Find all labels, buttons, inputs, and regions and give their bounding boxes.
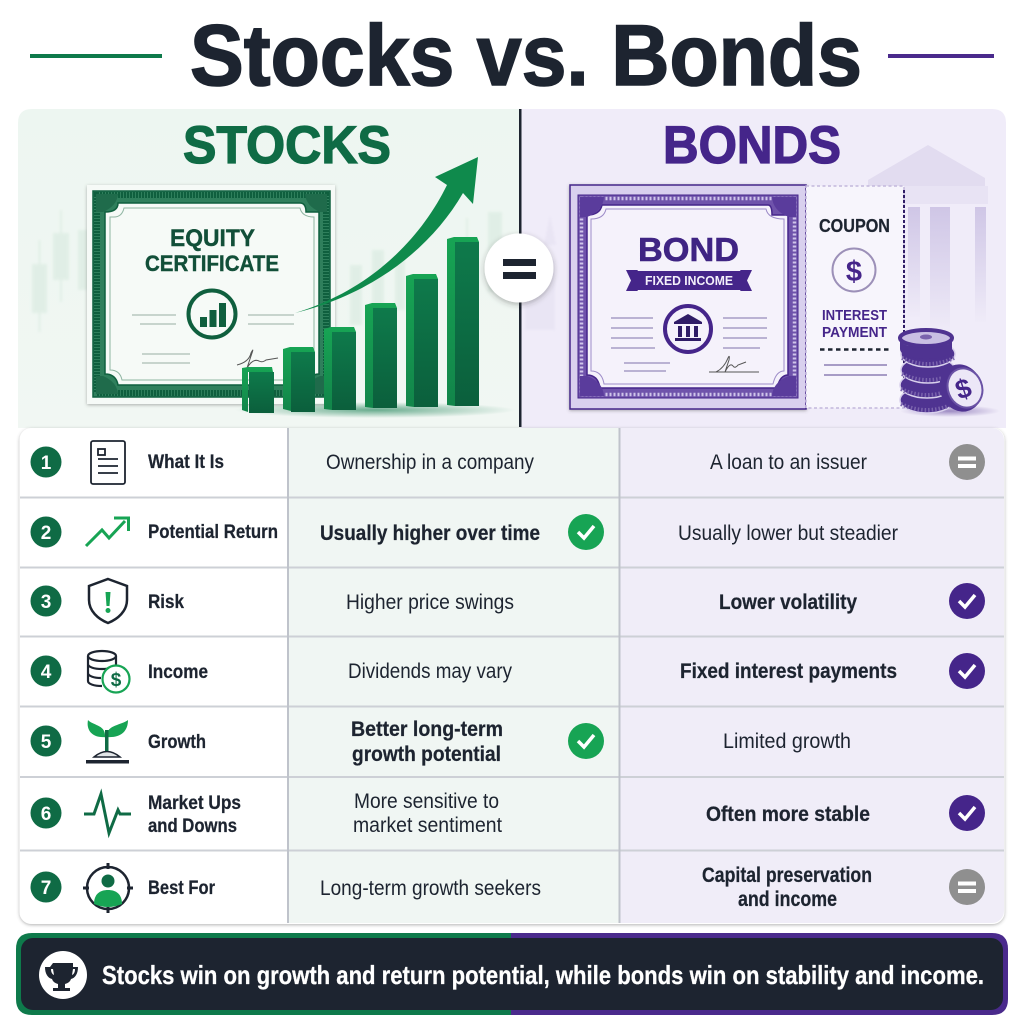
row 5: growth	[30, 718, 851, 766]
icon: trophy	[39, 951, 87, 999]
row 6: market ups and downs: and Downs	[148, 816, 237, 837]
icon: coin stack	[88, 651, 130, 692]
row 4: income: 4	[41, 662, 52, 683]
row 7: best for	[30, 863, 985, 913]
comparison table	[20, 428, 1005, 924]
badge: purple check	[949, 653, 985, 689]
row 2: potential return: Usually lower but steadier	[678, 522, 898, 545]
row 4: income: Dividends may vary	[348, 660, 512, 683]
badge: green check	[568, 514, 604, 550]
coins	[900, 330, 1000, 418]
row 1: what it is: A loan to an issuer	[710, 451, 867, 474]
row 3: risk: Lower volatility	[719, 591, 857, 614]
row 6: market ups and downs: Often more stable	[706, 803, 870, 826]
panel: bonds hero	[520, 109, 1006, 428]
badge: green check	[568, 723, 604, 759]
row 4: income: Fixed interest payments	[680, 660, 897, 683]
icon: pulse line	[84, 794, 131, 833]
row 7: best for: Best For	[148, 878, 216, 899]
badge: neutral	[949, 869, 985, 905]
coins: $	[952, 372, 975, 406]
row 2: potential return: Usually higher over time	[320, 522, 540, 545]
icon: rising line	[86, 518, 128, 546]
title: Stocks vs. Bonds	[190, 8, 862, 104]
icon: document	[91, 441, 125, 484]
row 5: growth: Limited growth	[723, 730, 851, 753]
equity certificate	[87, 185, 335, 404]
row 1: what it is: What It Is	[148, 452, 224, 473]
background bank building	[525, 145, 988, 332]
row 2: potential return: Potential Return	[148, 522, 278, 543]
bond certificate: FIXED INCOME	[645, 273, 733, 288]
row 3: risk: Higher price swings	[346, 591, 514, 614]
coupon: $	[846, 256, 862, 288]
badge: purple check	[949, 795, 985, 831]
icon: shield	[89, 579, 127, 623]
row 1: what it is: Ownership in a company	[326, 451, 534, 474]
row 6: market ups and downs	[30, 790, 985, 837]
row 2: potential return: 2	[41, 523, 51, 544]
icon: target person	[83, 863, 133, 913]
row 6: market ups and downs: Market Ups	[148, 793, 241, 814]
row 5: growth: Better long-term	[351, 718, 503, 741]
coupon: COUPON	[819, 216, 890, 236]
row 6: market ups and downs: 6	[41, 804, 51, 825]
coupon	[806, 186, 904, 408]
row 5: growth: growth potential	[352, 743, 501, 766]
takeaway banner	[16, 933, 1008, 1015]
bond certificate	[570, 185, 806, 409]
row 1: what it is	[30, 441, 985, 484]
bond certificate: BOND	[638, 231, 739, 268]
row 7: best for: Capital preservation	[702, 864, 872, 887]
bar chart	[235, 237, 515, 418]
divider and equals badge	[484, 109, 554, 427]
heading: STOCKS: STOCKS	[183, 116, 391, 175]
row 2: potential return	[30, 514, 898, 550]
panel: stocks hero	[18, 109, 520, 428]
row 7: best for: 7	[41, 878, 51, 899]
badge: neutral	[949, 444, 985, 480]
row 4: income: Income	[148, 662, 208, 683]
row 3: risk: 3	[41, 592, 51, 613]
background candlesticks	[32, 210, 502, 332]
equity certificate: CERTIFICATE	[145, 251, 279, 276]
coupon: PAYMENT	[822, 324, 887, 341]
icon: coin stack: $	[111, 670, 122, 691]
row 1: what it is: 1	[41, 453, 52, 474]
heading: BONDS: BONDS	[663, 116, 841, 175]
row 3: risk: Risk	[148, 592, 184, 613]
row 6: market ups and downs: More sensitive to	[354, 790, 499, 813]
growth arrow	[295, 157, 478, 313]
icon: sprout	[86, 720, 129, 764]
row 7: best for: and income	[738, 888, 837, 911]
badge: purple check	[949, 583, 985, 619]
row 5: growth: Growth	[148, 732, 206, 753]
row 7: best for: Long-term growth seekers	[320, 877, 541, 900]
coupon: INTEREST	[822, 307, 887, 324]
row 6: market ups and downs: market sentiment	[353, 814, 502, 837]
row 5: growth: 5	[41, 732, 52, 753]
row 3: risk	[30, 579, 985, 623]
row 4: income	[30, 651, 985, 692]
equity certificate: EQUITY	[170, 225, 255, 252]
